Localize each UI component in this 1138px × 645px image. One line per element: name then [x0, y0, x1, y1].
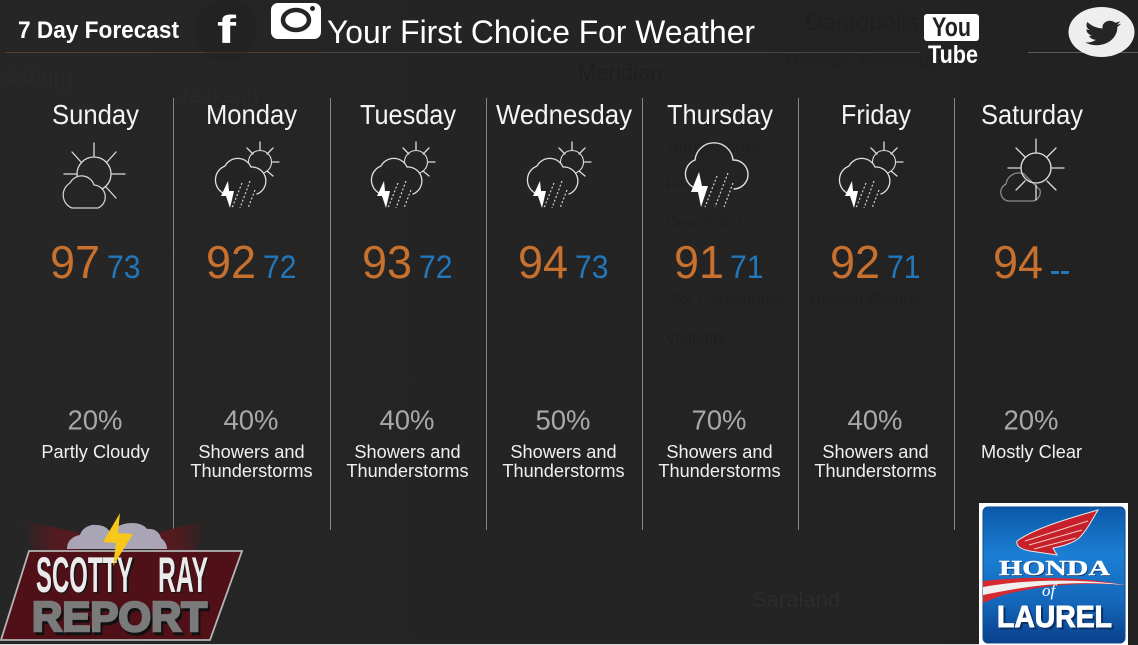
panel: Friday: 40%	[847, 404, 903, 436]
faint map labels behind the overlay: Demopolis	[805, 9, 918, 36]
panel: Sunday	[41, 99, 150, 462]
panel: Wednesday: Thunderstorms	[502, 461, 625, 481]
icon: thunderstorm with sun	[839, 142, 903, 208]
icon: youtube: You	[932, 12, 971, 42]
faint map labels behind the overlay: Meridian	[578, 60, 662, 85]
panel: Saturday: 94	[993, 236, 1043, 288]
panel: Wednesday: 94	[518, 236, 568, 288]
icon: lightning bolt	[103, 513, 133, 566]
panel: Sunday: 20%	[67, 404, 123, 436]
panel: Sunday: 97	[50, 236, 100, 288]
faint map labels behind the overlay: Visibility:	[665, 329, 731, 348]
panel: Tuesday	[346, 99, 469, 481]
panel: Friday: Friday	[841, 99, 911, 130]
icon: thunderstorm	[685, 143, 748, 207]
panel: Monday: Thunderstorms	[190, 461, 313, 481]
logo: Honda of Laurel	[979, 503, 1128, 645]
panel: Sunday: Partly Cloudy	[41, 442, 150, 462]
faint map labels behind the overlay	[0, 9, 942, 612]
logo: Honda of Laurel: of	[1042, 581, 1058, 600]
panel: Tuesday: 72	[419, 249, 452, 285]
heading: tagline: Your First Choice For Weather	[327, 14, 755, 50]
icon: red wing	[1017, 510, 1098, 555]
icon: mostly clear	[1001, 139, 1064, 201]
panel: Friday	[814, 99, 937, 481]
panel: Thursday: Thursday	[667, 99, 773, 130]
panel: Monday: 72	[263, 249, 296, 285]
icon: thunderstorm with sun	[215, 142, 279, 208]
panel: Thursday: 71	[730, 249, 764, 285]
icon: youtube	[924, 12, 979, 69]
icon: facebook: f	[217, 9, 237, 52]
faint map labels behind the overlay: Sky Conditions:	[665, 290, 783, 309]
logo: Scotty Ray Report: RAY	[158, 547, 208, 603]
panel: Friday: Showers and	[822, 442, 929, 462]
icon: partly cloudy	[63, 143, 125, 208]
bottom edge	[0, 644, 979, 645]
panel: Monday	[190, 99, 313, 481]
panel: Tuesday: Thunderstorms	[346, 461, 469, 481]
panel: Saturday	[981, 99, 1083, 462]
panel: Sunday: Sunday	[52, 99, 139, 130]
faint map labels behind the overlay: Temperature:	[665, 137, 765, 156]
heading: 7 Day Forecast: 7 Day Forecast	[18, 17, 179, 44]
panel: Saturday: Saturday	[981, 99, 1083, 130]
panel: Wednesday: 73	[575, 249, 608, 285]
logo: Scotty Ray Report	[1, 513, 242, 643]
icon: youtube: Tube	[928, 41, 978, 69]
faint map labels behind the overlay: Meridian, Mississippi	[785, 51, 942, 70]
faint map labels behind the overlay: Broken Clouds	[810, 290, 922, 309]
panel: Tuesday: Showers and	[354, 442, 461, 462]
panel: Monday: Monday	[206, 99, 297, 130]
panel: Thursday: Thunderstorms	[658, 461, 781, 481]
panel: Saturday: 20%	[1003, 404, 1059, 436]
icon: thunderstorm with sun	[371, 142, 435, 208]
panel: Wednesday: Wednesday	[496, 99, 632, 130]
panel: Tuesday: Tuesday	[360, 99, 456, 130]
logo: Honda of Laurel: HONDA	[999, 556, 1111, 580]
icon: thunderstorm with sun	[527, 142, 591, 208]
panel: Tuesday: 93	[362, 236, 412, 288]
panel: Thursday	[658, 99, 781, 481]
panel: Friday: 71	[887, 249, 920, 285]
logo: Honda of Laurel: LAUREL	[997, 599, 1112, 634]
red and white ribbon	[983, 578, 1125, 603]
icon: facebook	[195, 0, 257, 61]
faint map labels behind the overlay: Dew Point:	[665, 213, 747, 232]
logo: Scotty Ray Report: REPORT	[32, 593, 207, 640]
icon: instagram	[271, 3, 321, 39]
panel: Tuesday: 40%	[379, 404, 435, 436]
panel: Thursday: Showers and	[666, 442, 773, 462]
panel: Monday: 40%	[223, 404, 279, 436]
panel: Thursday: 70%	[691, 404, 747, 436]
icon: storm cloud	[67, 523, 167, 549]
panel: Monday: Showers and	[198, 442, 305, 462]
panel: Saturday: Mostly Clear	[981, 442, 1082, 462]
logo: Scotty Ray Report: REPORT	[34, 596, 209, 643]
panel: Wednesday: 50%	[535, 404, 591, 436]
logo: Scotty Ray Report: SCOTTY	[36, 547, 133, 603]
panel: Friday: 92	[830, 236, 880, 288]
panel: Wednesday: Showers and	[510, 442, 617, 462]
panel: Monday: 92	[206, 236, 256, 288]
panel: Wednesday	[496, 99, 632, 481]
icon: twitter	[1068, 7, 1134, 57]
faint map labels behind the overlay: Saraland	[752, 587, 840, 612]
faint map labels behind the overlay: Feels Like:	[665, 175, 747, 194]
panel: Friday: Thunderstorms	[814, 461, 937, 481]
faint map labels behind the overlay: Jackson	[178, 83, 259, 108]
logo: Honda of Laurel: HONDA	[1000, 557, 1112, 581]
logo: Honda of Laurel: LAUREL	[999, 601, 1114, 636]
header rule	[5, 52, 1138, 53]
panel: Thursday: 91	[674, 236, 724, 288]
logo: Scotty Ray Report: SCOTTY	[37, 548, 135, 604]
panel: Sunday: 73	[107, 249, 140, 285]
logo: Scotty Ray Report: RAY	[159, 548, 209, 604]
